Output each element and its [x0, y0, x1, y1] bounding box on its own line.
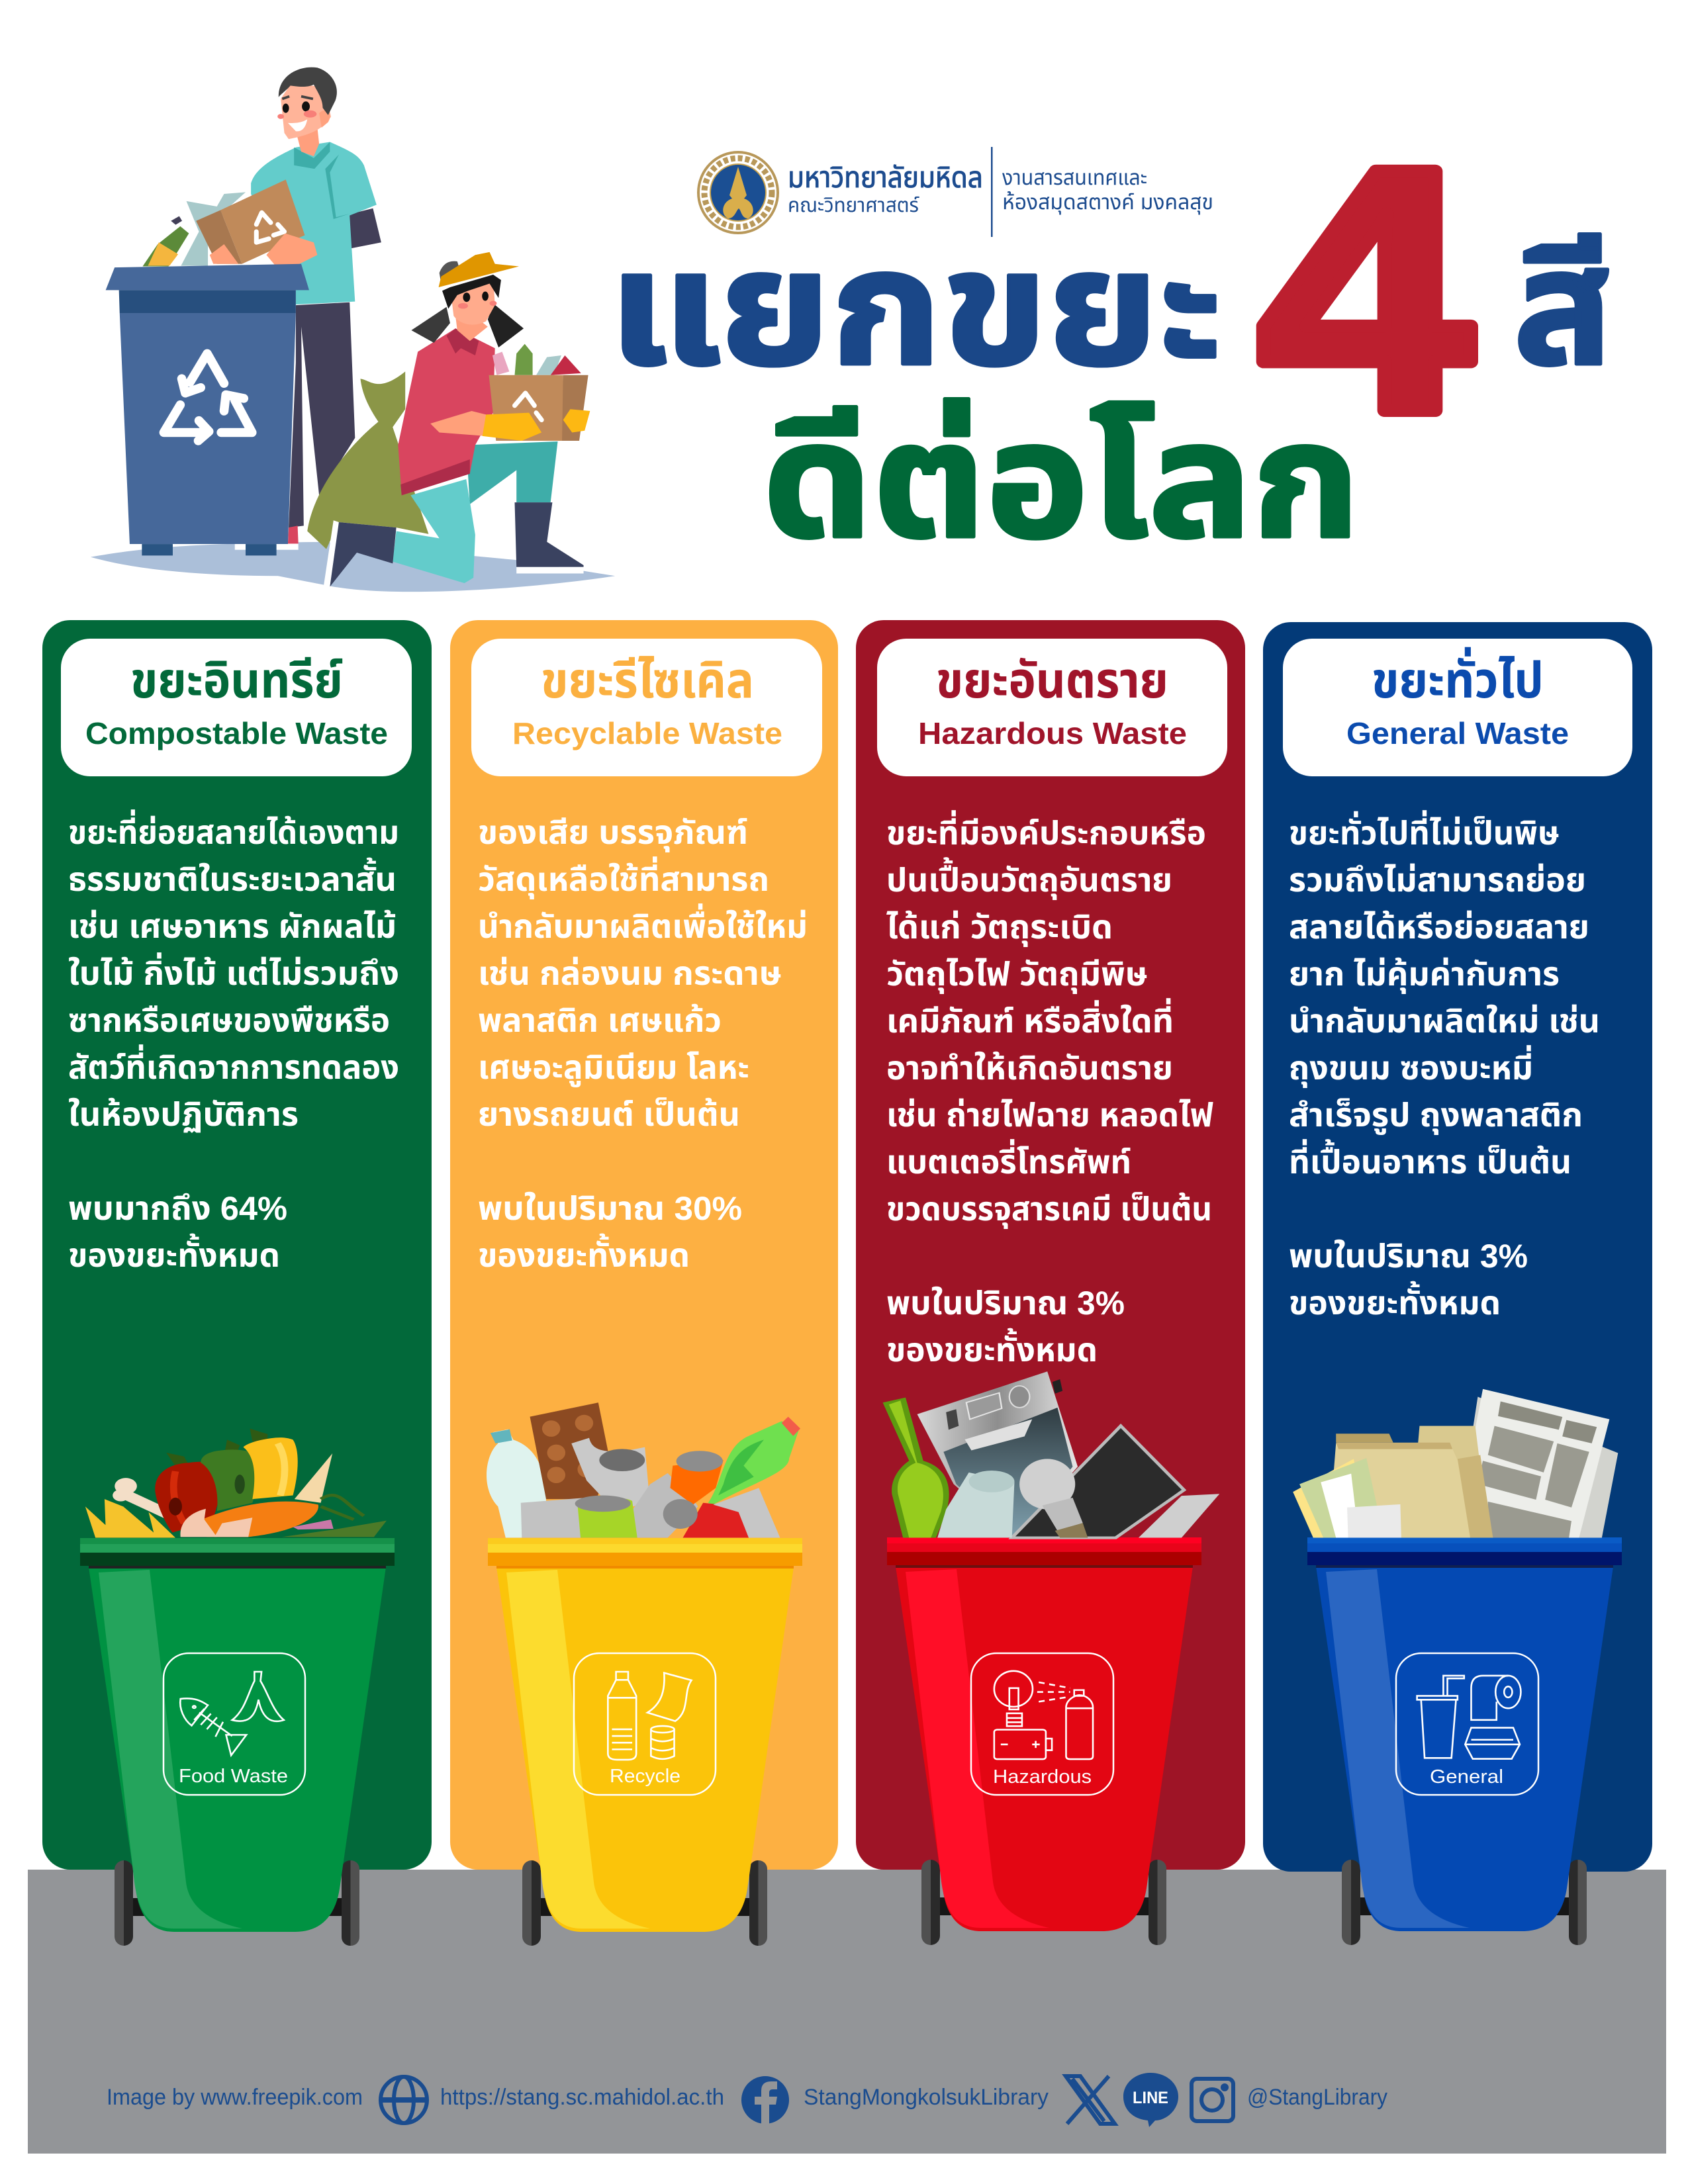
description: เคมีภัณฑ์ หรือสิ่งใดที่	[886, 998, 1174, 1040]
pile: general paper waste	[1293, 1389, 1618, 1538]
sticker: food waste	[164, 1653, 305, 1795]
image credit: Image by www.freepik.com	[107, 2085, 363, 2110]
instagram handle: @StangLibrary	[1247, 2085, 1387, 2110]
description	[1289, 810, 1600, 1322]
organisation name: คณะวิทยาศาสตร์	[788, 195, 919, 216]
red bin	[887, 1537, 1201, 1945]
description: ขวดบรรจุสารเคมี เป็นต้น	[886, 1191, 1212, 1229]
description: เช่น ถ่ายไฟฉาย หลอดไฟ	[886, 1097, 1213, 1134]
website: https://stang.sc.mahidol.ac.th	[440, 2085, 724, 2110]
description: ถุงขนม ซองบะหมี่	[1289, 1045, 1533, 1088]
heading card: Compostable Waste	[85, 716, 388, 751]
description	[68, 809, 399, 1274]
blue recycling bin	[106, 264, 309, 555]
heading card	[471, 639, 822, 776]
footer: contact links	[107, 2073, 1387, 2127]
sticker: hazardous	[971, 1653, 1113, 1795]
heading card: Recyclable Waste	[512, 716, 782, 751]
description: ใบไม้ กิ่งไม้ แต่ไม่รวมถึง	[68, 952, 399, 992]
icon: X	[1066, 2076, 1115, 2124]
heading card: ขยะอันตราย	[936, 653, 1168, 709]
pile: food waste	[85, 1429, 387, 1537]
blue bin	[1307, 1537, 1622, 1945]
yellow bin	[488, 1538, 802, 1946]
sticker: general	[1396, 1653, 1538, 1795]
description: รวมถึงไม่สามารถย่อย	[1289, 862, 1586, 899]
organisation name: งานสารสนเทศและ	[1002, 165, 1147, 189]
woman	[324, 252, 584, 587]
description: พบมากถึง 64%	[68, 1190, 287, 1227]
description: ปนเปื้อนวัตถุอันตราย	[886, 857, 1172, 900]
description: พบในปริมาณ 3%	[1289, 1238, 1528, 1275]
description: ของขยะทั้งหมด	[478, 1234, 690, 1274]
description: ของเสีย บรรจุภัณฑ์	[478, 814, 748, 852]
box held by woman	[430, 344, 590, 441]
title	[608, 97, 1613, 571]
bottle and bag in bin	[142, 192, 246, 267]
icon: globe	[381, 2077, 427, 2123]
description: ขยะทั่วไปที่ไม่เป็นพิษ	[1289, 810, 1560, 852]
heading card: ขยะทั่วไป	[1372, 647, 1544, 709]
description: แบตเตอรี่โทรศัพท์	[886, 1139, 1131, 1181]
description: อาจทำให้เกิดอันตราย	[886, 1050, 1173, 1087]
sticker: hazardous: Hazardous	[993, 1766, 1092, 1788]
description: ที่เปื้อนอาหาร เป็นต้น	[1289, 1139, 1571, 1181]
icon: bottle, paper and can	[608, 1672, 692, 1760]
panel: compostable waste	[42, 620, 432, 1870]
garbage bag	[307, 371, 428, 549]
description: วัสดุเหลือใช้ที่สามารถ	[478, 856, 769, 899]
icon: LINE	[1123, 2073, 1178, 2127]
description: ยางรถยนต์ เป็นต้น	[478, 1096, 740, 1133]
sticker: recycle	[574, 1653, 716, 1795]
title: แยกขยะ	[608, 217, 1223, 398]
title: สี	[1513, 217, 1613, 398]
description: นำกลับมาผลิตใหม่ เช่น	[1289, 1003, 1600, 1040]
icon: instagram	[1192, 2079, 1233, 2121]
organisation name: ห้องสมุดสตางค์ มงคลสุข	[1002, 190, 1213, 214]
description	[478, 814, 808, 1274]
sticker: recycle: Recycle	[610, 1766, 680, 1787]
heading card	[1283, 639, 1632, 776]
man	[235, 68, 381, 550]
description: ของขยะทั้งหมด	[1289, 1281, 1501, 1322]
ground shadow	[91, 542, 615, 592]
description: ขยะที่มีองค์ประกอบหรือ	[886, 810, 1206, 852]
sticker: food waste: Food Waste	[179, 1766, 288, 1787]
icon: LINE: LINE	[1133, 2089, 1168, 2107]
description: ของขยะทั้งหมด	[68, 1234, 280, 1274]
description: เช่น กล่องนม กระดาษ	[478, 955, 782, 992]
title: 4	[1258, 97, 1476, 484]
heading card: ขยะรีไซเคิล	[541, 653, 754, 709]
pile: recyclables	[487, 1402, 800, 1537]
description: ขยะที่ย่อยสลายได้เองตาม	[68, 809, 399, 851]
description: เช่น เศษอาหาร ผักผลไม้	[68, 908, 397, 945]
icon: bulb, spray can and battery	[994, 1671, 1093, 1759]
ground band	[28, 1870, 1666, 2154]
title: ดีต่อโลก	[763, 390, 1360, 571]
illustration: two people sorting waste	[91, 68, 615, 592]
description: เศษอะลูมิเนียม โลหะ	[478, 1049, 749, 1087]
heading card: ขยะอินทรีย์	[130, 653, 343, 709]
description: ซากหรือเศษของพืชหรือ	[68, 1002, 390, 1039]
facebook name: StangMongkolsukLibrary	[804, 2085, 1049, 2110]
organisation name	[788, 147, 1213, 237]
description: พลาสติก เศษแก้ว	[478, 1002, 722, 1039]
heading card	[877, 639, 1227, 776]
cardboard box held by man	[196, 179, 317, 273]
pile: hazardous items	[883, 1371, 1219, 1538]
panel: recyclable waste	[450, 620, 838, 1870]
description: ได้แก่ วัตถุระเบิด	[886, 909, 1113, 947]
heading card: Hazardous Waste	[918, 716, 1187, 751]
logo: Mahidol University seal	[698, 152, 778, 233]
organisation name: มหาวิทยาลัยมหิดล	[788, 161, 983, 194]
description: นำกลับมาผลิตเพื่อใช้ใหม่	[478, 903, 808, 945]
icon: fish bone and banana peel	[180, 1672, 284, 1755]
heading card	[61, 639, 412, 776]
description: วัตถุไวไฟ วัตถุมีพิษ	[886, 956, 1148, 994]
sticker: general: General	[1430, 1766, 1503, 1788]
heading card: General Waste	[1346, 716, 1569, 751]
icon: facebook	[741, 2076, 789, 2124]
description: สลายได้หรือย่อยสลาย	[1289, 909, 1589, 946]
panel: general waste	[1263, 622, 1652, 1872]
description: ในห้องปฏิบัติการ	[68, 1096, 299, 1133]
description: ของขยะทั้งหมด	[886, 1328, 1098, 1369]
panel: hazardous waste	[856, 620, 1245, 1870]
description: ยาก ไม่คุ้มค่ากับการ	[1289, 956, 1560, 994]
description	[886, 810, 1213, 1369]
description: ธรรมชาติในระยะเวลาสั้น	[68, 858, 397, 898]
description: พบในปริมาณ 30%	[478, 1190, 742, 1227]
icon: cup, tissue roll and food box	[1417, 1676, 1521, 1759]
description: สำเร็จรูป ถุงพลาสติก	[1289, 1097, 1583, 1135]
green bin	[80, 1538, 395, 1946]
description: สัตว์ที่เกิดจากการทดลอง	[68, 1044, 399, 1086]
description: พบในปริมาณ 3%	[886, 1285, 1125, 1322]
